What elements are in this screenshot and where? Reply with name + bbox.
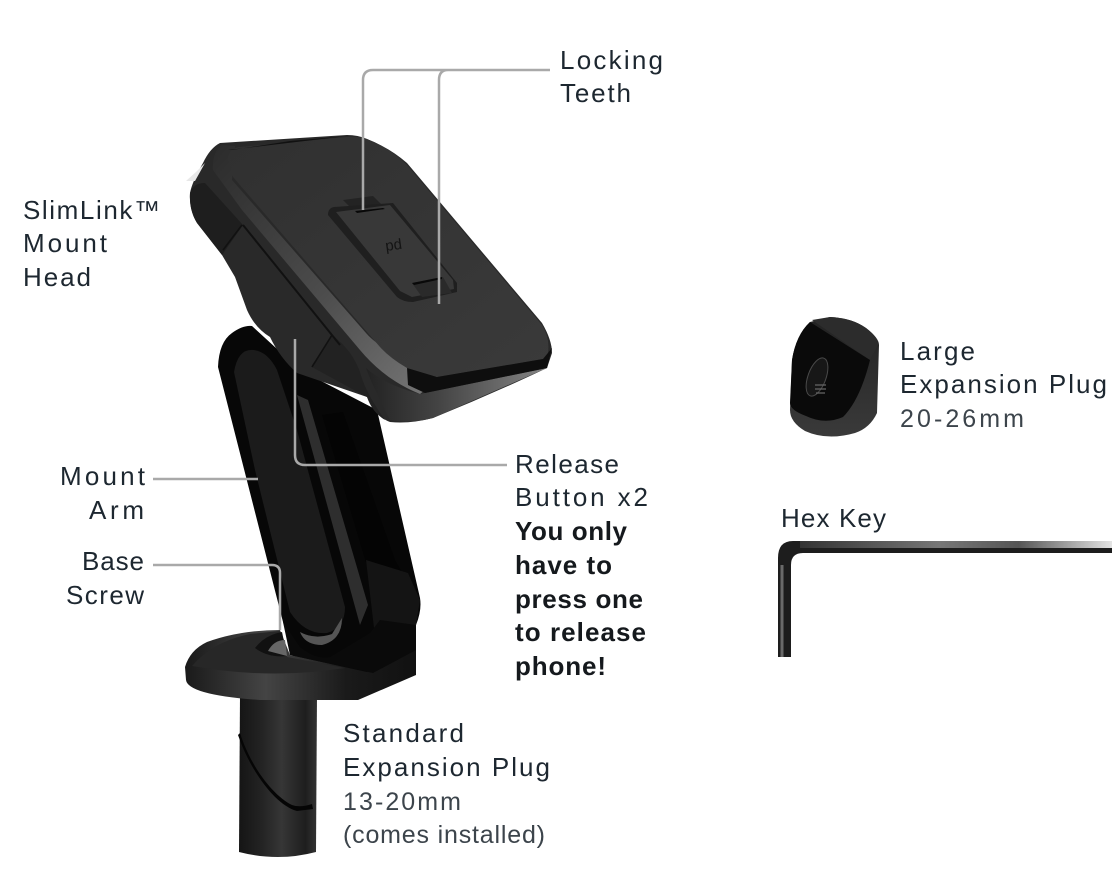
- leader: base screw: [153, 565, 280, 630]
- base with screw: [185, 620, 416, 700]
- mount head plate: [213, 136, 552, 394]
- label: locking teeth: Teeth: [560, 78, 631, 108]
- leader: mount arm: [153, 478, 258, 480]
- label: mount arm: Mount: [60, 461, 146, 491]
- label: SlimLink mount head: Head: [23, 262, 91, 292]
- label: standard expansion plug: Standard: [343, 718, 464, 748]
- label: hex key: Hex Key: [781, 503, 886, 533]
- label: standard expansion plug: 13-20mm: [343, 788, 461, 816]
- note: release instruction: phone!: [515, 651, 606, 681]
- label: standard expansion plug: (comes installed): [343, 821, 545, 849]
- label: large expansion plug: Large: [900, 336, 975, 366]
- note: release instruction: You only: [515, 516, 628, 546]
- leader: locking teeth: [363, 70, 550, 304]
- label: large expansion plug: Expansion Plug: [900, 369, 1107, 399]
- standard expansion plug: [238, 695, 317, 857]
- leader: release button: [295, 339, 507, 465]
- label: mount arm: Arm: [89, 495, 144, 525]
- note: release instruction: press one: [515, 584, 643, 614]
- label: SlimLink mount head: Mount: [23, 228, 108, 258]
- icon: hex key: [778, 541, 1112, 657]
- logo mark: pd: [384, 236, 403, 255]
- note: release instruction: have to: [515, 550, 612, 580]
- label: release button: [515, 449, 648, 512]
- note: release instruction: to release: [515, 617, 646, 647]
- mount head body and release buttons: [186, 135, 552, 422]
- icon: SlimLink mount assembly: [185, 135, 552, 857]
- label: locking teeth: [560, 45, 663, 108]
- label: release button: Button x2: [515, 482, 648, 512]
- mount arm: [218, 326, 420, 680]
- label: SlimLink mount head: SlimLink™: [23, 195, 160, 225]
- icon: large expansion plug: [790, 317, 879, 437]
- label: large expansion plug: [900, 336, 1107, 433]
- label: base screw: Screw: [66, 580, 144, 610]
- label: standard expansion plug: [343, 718, 550, 849]
- label: standard expansion plug: Expansion Plug: [343, 752, 550, 782]
- label: large expansion plug: 20-26mm: [900, 405, 1024, 433]
- label: mount arm: [60, 461, 146, 525]
- note: release instruction: [515, 516, 646, 681]
- label: base screw: Base: [82, 546, 144, 576]
- label: base screw: [66, 546, 144, 610]
- label: SlimLink mount head: [23, 195, 160, 292]
- label: locking teeth: Locking: [560, 45, 663, 75]
- locking teeth plate: [328, 196, 457, 302]
- label: release button: Release: [515, 449, 619, 479]
